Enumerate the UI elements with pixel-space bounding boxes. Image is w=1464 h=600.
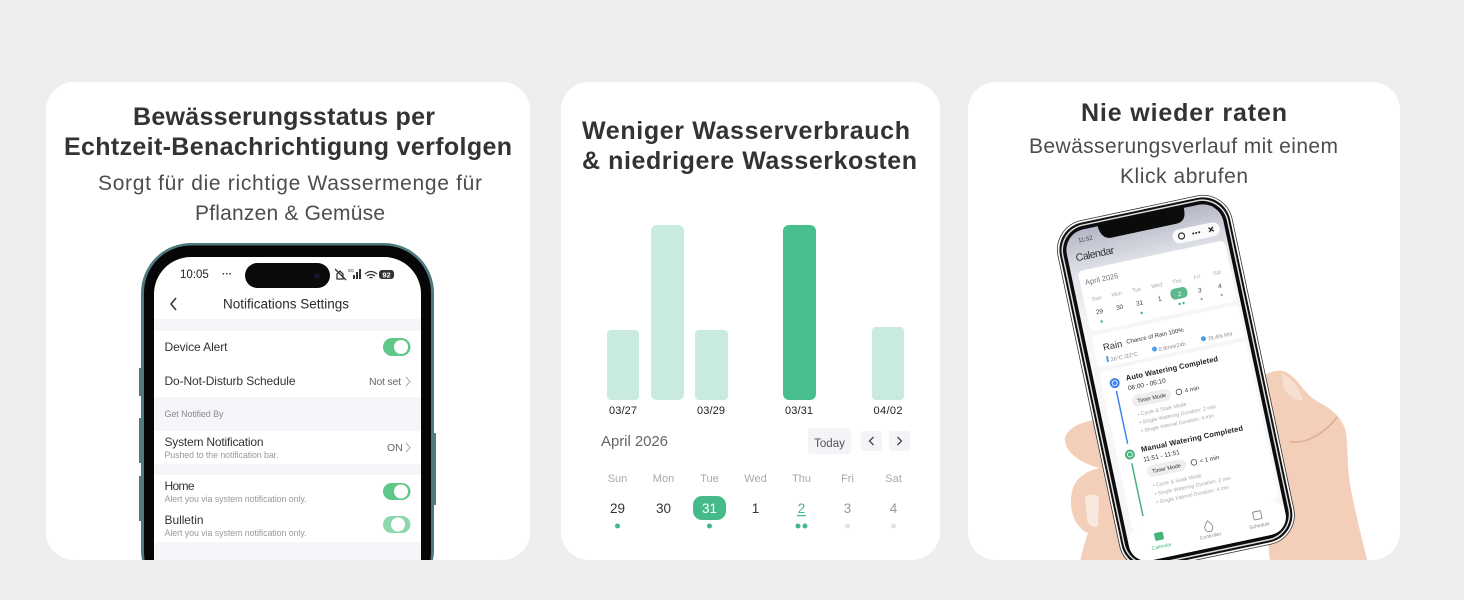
heading: water usage xyxy=(582,117,917,175)
mini calendar: 4 xyxy=(1217,283,1223,290)
heading: notifications xyxy=(64,103,512,161)
label: get notified by: Get Notified By xyxy=(164,409,224,419)
row: do-not-disturb schedule: Do-Not-Disturb Schedule xyxy=(164,374,296,388)
calendar week: Fri xyxy=(841,473,854,485)
mini calendar: Wed xyxy=(1151,282,1163,290)
hand holding phone xyxy=(1052,190,1368,575)
status bar: ··· xyxy=(222,269,232,280)
menu pill xyxy=(1172,222,1220,244)
hand: thumb and palm xyxy=(1266,370,1368,560)
timeline: manual watering: Timer Mode xyxy=(1152,463,1182,475)
timeline: manual watering: • Single Interval Duration: 4 min xyxy=(1156,485,1230,506)
weather card: 0.9mm/24h xyxy=(1158,342,1186,353)
calendar header: Today xyxy=(814,438,845,450)
subheading: notifications xyxy=(98,172,482,225)
subheading: watering history: Klick abrufen xyxy=(1120,165,1248,188)
calendar header: April 2026 xyxy=(601,433,668,450)
mini calendar xyxy=(1078,240,1237,332)
calendar week: Sat xyxy=(885,473,902,485)
weather card: 78.4% RH xyxy=(1207,332,1233,343)
timeline: auto watering: • Single Interval Duration: 4 min xyxy=(1141,413,1215,435)
phone: calendar screen xyxy=(1052,190,1300,575)
row: bulletin: Bulletin xyxy=(164,513,204,527)
row: system notification: Pushed to the notification bar. xyxy=(164,450,278,460)
bar chart: daily water use: 04/02 xyxy=(874,405,902,417)
row: home: Alert you via system notification only. xyxy=(164,494,306,504)
row: device alert xyxy=(164,338,410,356)
hand: fingers xyxy=(1065,420,1200,562)
calendar week: Thu xyxy=(792,473,811,485)
calendar week: 3 xyxy=(844,501,851,516)
row: bulletin: Alert you via system notification only. xyxy=(164,528,306,538)
header: notifications settings: Notifications Settings xyxy=(223,296,349,312)
timeline: manual watering: 11:51 - 11:51 xyxy=(1143,449,1181,464)
calendar week: Mon xyxy=(653,473,674,485)
mini calendar: Fri xyxy=(1193,274,1201,281)
timeline: auto watering: Timer Mode xyxy=(1137,393,1167,405)
mini calendar: 31 xyxy=(1135,299,1144,308)
mini calendar: Tue xyxy=(1132,287,1142,294)
calendar header xyxy=(601,428,910,454)
row: home: Home xyxy=(164,479,195,493)
mini calendar: 1 xyxy=(1157,296,1163,303)
timeline: manual watering: • Cycle & Soak Mode xyxy=(1152,473,1202,489)
subheading: watering history xyxy=(1029,135,1338,188)
timeline: manual watering: • Single Watering Duration: 2 min xyxy=(1154,476,1232,498)
today controls xyxy=(1171,247,1221,268)
calendar week: Wed xyxy=(744,473,767,485)
calendar week: 31 xyxy=(702,501,717,516)
timeline: auto watering: • Single Watering Duration: 2 min xyxy=(1139,404,1216,426)
timeline: auto watering: 4 min xyxy=(1184,386,1200,395)
calendar week: 2 xyxy=(798,501,805,516)
panel: real-time notifications xyxy=(46,82,530,600)
bottom navigation: Controller xyxy=(1199,531,1222,542)
subheading: watering history: Bewässerungsverlauf mit einem xyxy=(1029,135,1338,158)
weather card: Chance of Rain 100% xyxy=(1126,328,1185,346)
calendar week: Sun xyxy=(608,473,627,485)
status bar: 5G xyxy=(348,268,355,273)
row: system notification: System Notification xyxy=(164,435,264,449)
bar chart: daily water use: 03/27 xyxy=(609,405,637,417)
mini calendar: Sun xyxy=(1091,295,1102,303)
mini calendar: 30 xyxy=(1115,304,1124,312)
bottom navigation: Calendar xyxy=(1151,542,1173,552)
calendar week: 1 xyxy=(752,501,759,516)
row: device alert: Device Alert xyxy=(164,340,228,354)
calendar week: Tue xyxy=(700,473,719,485)
mini calendar: Sat xyxy=(1212,270,1222,277)
row: do-not-disturb schedule: Not set xyxy=(369,376,401,388)
mini calendar: Mon xyxy=(1111,291,1123,299)
status bar xyxy=(180,263,394,288)
heading: water usage: & niedrigere Wasserkosten xyxy=(582,147,917,175)
weather card: 26°C /22°C xyxy=(1110,352,1139,363)
notch xyxy=(1097,207,1187,240)
screen title: Calendar xyxy=(1075,244,1116,264)
timeline: manual watering: < 1 min xyxy=(1199,455,1220,465)
today controls: Today xyxy=(1175,258,1191,267)
phone: notification settings screen xyxy=(139,243,436,560)
bar chart: daily water use: 03/31 xyxy=(785,405,813,417)
bar chart: daily water use: 03/29 xyxy=(697,405,725,417)
row: do-not-disturb schedule xyxy=(166,376,410,386)
mini calendar: April 2026 xyxy=(1084,271,1119,287)
timeline: auto watering: • Cycle & Soak Mode xyxy=(1137,402,1187,418)
calendar week: 30 xyxy=(656,501,671,516)
timeline: manual watering xyxy=(1124,425,1243,516)
heading: notifications: Bewässerungsstatus per xyxy=(133,103,435,131)
heading: water usage: Weniger Wasserverbrauch xyxy=(582,117,910,145)
subheading: notifications: Pflanzen & Gemüse xyxy=(195,202,385,225)
heading: watering history: Nie wieder raten xyxy=(1081,99,1287,127)
row: home xyxy=(164,479,410,504)
panel: water usage xyxy=(561,82,940,560)
row: bulletin xyxy=(164,513,410,538)
timeline: manual watering: Manual Watering Completed xyxy=(1140,423,1244,454)
thumb nail xyxy=(1281,373,1303,400)
timeline: auto watering: 06:00 - 06:10 xyxy=(1127,377,1167,392)
mini calendar: 29 xyxy=(1095,308,1104,316)
bottom navigation: Schedule xyxy=(1249,521,1271,531)
panel: watering history xyxy=(968,82,1400,575)
status time: 11:52 xyxy=(1078,235,1094,244)
calendar week: 4 xyxy=(890,501,898,516)
weather card: Rain xyxy=(1102,339,1123,354)
bar chart: daily water use xyxy=(607,225,904,417)
status bar: 92 xyxy=(382,270,391,280)
row: system notification: ON xyxy=(387,442,403,454)
heading: notifications: Echtzeit-Benachrichtigung verfolgen xyxy=(64,133,512,161)
timeline: auto watering: Auto Watering Completed xyxy=(1125,354,1219,383)
row: system notification xyxy=(165,438,410,458)
subheading: notifications: Sorgt für die richtige Wassermenge für xyxy=(98,172,482,195)
status bar: 10:05 xyxy=(180,269,209,281)
weather card xyxy=(1091,305,1245,368)
mini calendar: Thu xyxy=(1172,278,1182,286)
mini calendar: 2 xyxy=(1177,291,1183,298)
timeline: auto watering xyxy=(1099,341,1279,529)
mini calendar: 3 xyxy=(1197,287,1203,295)
calendar week xyxy=(608,473,902,528)
bottom navigation xyxy=(1152,510,1270,550)
calendar week: 29 xyxy=(610,501,625,516)
